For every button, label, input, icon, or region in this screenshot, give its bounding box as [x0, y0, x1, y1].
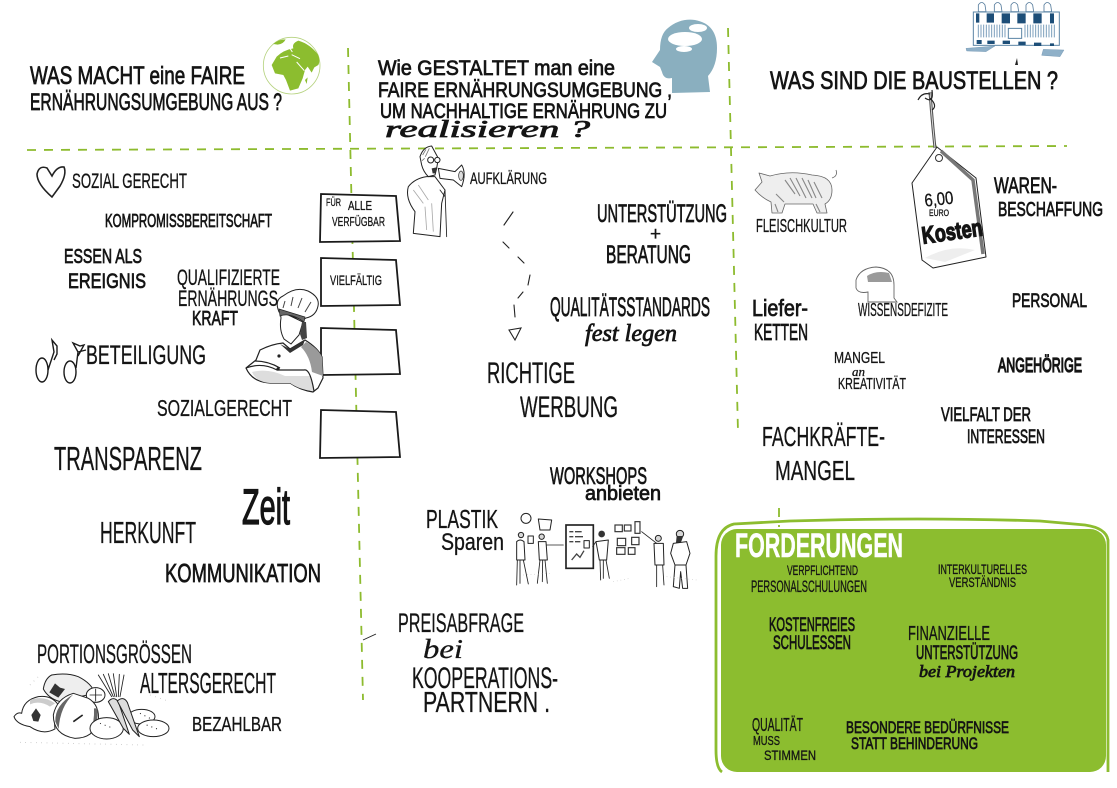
text: Unterstützung und Beratung — [597, 200, 727, 269]
text: qualifizierte Ernährungskraft: ERNÄHRUNGS — [178, 286, 278, 311]
text: Portionsgrößen: PORTIONSGRÖSSEN — [37, 639, 192, 669]
illustration: vegetables — [14, 674, 170, 745]
text: Mangel an Kreativität: MANGEL — [834, 350, 885, 367]
demand: besondere Bedürfnisse: STATT BEHINDERUNG — [851, 734, 978, 753]
heading: first question: ERNÄHRUNGSUMGEBUNG AUS ? — [30, 89, 282, 116]
heading: second question: Wie GESTALTET man eine — [378, 57, 615, 80]
demand: Qualität muss stimmen: STIMMEN — [764, 747, 816, 763]
text: Lieferketten — [752, 295, 808, 345]
heading: second question: realisieren ? — [385, 117, 590, 143]
demand: kostenfreies Schulessen — [769, 615, 855, 654]
panel heading: FORDERUNGEN — [735, 527, 903, 565]
text: Mangel an Kreativität: an — [852, 364, 865, 379]
text: Kompromissbereitschaft: KOMPROMISSBEREITSCHAFT — [105, 211, 272, 231]
text: Mangel an Kreativität — [834, 350, 906, 393]
text: Lieferketten: Liefer- — [752, 295, 808, 321]
text: Workshops anbieten: WORKSHOPS — [550, 463, 647, 490]
text: Vielfalt der Interessen: VIELFALT DER — [941, 405, 1031, 426]
icon: construction barrier — [966, 2, 1064, 57]
text: Qualitätsstandards festlegen — [550, 292, 710, 347]
text: Vielfalt der Interessen — [941, 405, 1045, 448]
text: Unterstützung und Beratung: UNTERSTÜTZUNG — [597, 200, 727, 228]
panel: Forderungen — [716, 519, 1108, 772]
text: Aufklärung: AUFKLÄRUNG — [470, 169, 547, 188]
icon: price tag with rope: EURO — [929, 208, 949, 218]
text: Bezahlbar: BEZAHLBAR — [192, 714, 282, 736]
icon: head with knowledge gap — [856, 267, 897, 302]
text: Fleischkultur: FLEISCHKULTUR — [756, 216, 847, 236]
heading: first question: WAS MACHT eine FAIRE — [30, 62, 245, 90]
text: Workshops anbieten — [550, 463, 661, 505]
text: Plastik sparen: PLASTIK — [426, 504, 498, 534]
text: qualifizierte Ernährungskraft: KRAFT — [192, 308, 238, 330]
heading: second question — [378, 57, 672, 143]
demand: besondere Bedürfnisse: BESONDERE BEDÜRFNISSE — [846, 718, 1009, 737]
text: Transparenz: TRANSPARENZ — [54, 440, 202, 477]
text: Personal: PERSONAL — [1012, 291, 1087, 312]
text: Qualitätsstandards festlegen: QUALITÄTSSTANDARDS — [550, 292, 710, 322]
demand: finanzielle Unterstützung: bei Projekten — [919, 662, 1015, 681]
text: Vielfalt der Interessen: INTERESSEN — [967, 427, 1045, 448]
demand: Qualität muss stimmen: MUSS — [753, 733, 780, 748]
demand: Qualität muss stimmen: QUALITÄT — [752, 715, 803, 735]
text: Essen als Ereignis: EREIGNIS — [68, 270, 146, 293]
box: Für alle verfügbar: VERFÜGBAR — [332, 214, 385, 229]
tag price text: 6,00 — [923, 188, 954, 211]
text: Preisabfrage: PREISABFRAGE — [398, 608, 524, 638]
text: Essen als Ereignis — [64, 246, 146, 293]
demand: finanzielle Unterstützung: FINANZIELLE — [908, 623, 990, 645]
box: Für alle verfügbar — [320, 194, 400, 242]
text: Altersgerecht: ALTERSGERECHT — [140, 668, 276, 700]
text: Warenbeschaffung — [994, 173, 1103, 221]
box: empty two — [320, 410, 400, 458]
text: Beteiligung: BETEILIGUNG — [86, 340, 206, 370]
text: Herkunft: HERKUNFT — [100, 515, 196, 550]
heading: second question: UM NACHHALTIGE ERNÄHRUNG ZU — [380, 100, 667, 123]
text: Lieferketten: KETTEN — [754, 319, 808, 345]
demand: interkulturelles Verständnis: VERSTÄNDNIS — [949, 574, 1016, 590]
box: empty one — [321, 328, 400, 375]
icon: price tag with rope — [912, 58, 1018, 268]
text: Fachkräftemangel — [762, 421, 885, 486]
demand: kostenfreies Schulessen: KOSTENFREIES — [769, 615, 855, 636]
icon: person with megaphone — [407, 146, 464, 237]
text: Zeit: Zeit — [242, 479, 290, 535]
heading: first question — [30, 62, 282, 116]
demand: interkulturelles Verständnis — [938, 561, 1027, 590]
text: sozial gerecht: SOZIAL GERECHT — [72, 170, 187, 193]
text: richtige Werbung: WERBUNG — [520, 391, 618, 424]
text: richtige Werbung — [487, 357, 618, 424]
text: Unterstützung und Beratung: + — [650, 224, 661, 245]
text: Qualitätsstandards festlegen: fest legen — [585, 321, 677, 347]
text: Wissensdefizite: WISSENSDEFIZITE — [858, 300, 948, 320]
text: Plastik sparen — [426, 504, 504, 556]
text: Preisabfrage: bei — [423, 634, 463, 664]
text: Plastik sparen: Sparen — [441, 529, 504, 556]
demand: interkulturelles Verständnis: INTERKULTURELLES — [938, 561, 1027, 577]
icon: head with thought clouds — [652, 20, 717, 93]
text: Unterstützung und Beratung: BERATUNG — [606, 241, 691, 269]
box: Für alle verfügbar: ALLE — [348, 198, 372, 213]
text: Fachkräftemangel: FACHKRÄFTE- — [762, 421, 885, 452]
text: Fachkräftemangel: MANGEL — [775, 455, 855, 486]
demand: besondere Bedürfnisse — [846, 718, 1009, 753]
icon: raised hands — [36, 340, 86, 383]
icon: globe — [263, 37, 320, 94]
demand: Personalschulungen — [751, 562, 867, 596]
demand: Personalschulungen: PERSONALSCHULUNGEN — [751, 577, 867, 596]
box: Vielfältig: VIELFÄLTIG — [330, 272, 382, 288]
box: Vielfältig — [321, 258, 400, 306]
text: Kommunikation: KOMMUNIKATION — [165, 558, 321, 588]
text: richtige Werbung: RICHTIGE — [487, 357, 575, 390]
text: Warenbeschaffung: WAREN- — [994, 173, 1057, 198]
demand: finanzielle Unterstützung — [908, 623, 1018, 681]
text: qualifizierte Ernährungskraft: QUALIFIZIERTE — [177, 265, 280, 290]
text: Essen als Ereignis: ESSEN ALS — [64, 246, 142, 268]
text: Preisabfrage: PARTNERN . — [423, 687, 550, 719]
text: Mangel an Kreativität: KREATIVITÄT — [838, 375, 906, 393]
text: qualifizierte Ernährungskraft — [177, 265, 280, 330]
text: Workshops anbieten: anbieten — [585, 483, 661, 505]
icon: heart — [37, 167, 65, 197]
icon: pig — [755, 170, 836, 213]
text: Sozialgerecht: SOZIALGERECHT — [157, 395, 292, 421]
illustration: chef — [246, 289, 323, 392]
demand: kostenfreies Schulessen: SCHULESSEN — [773, 633, 851, 654]
text: Preisabfrage: KOOPERATIONS- — [412, 662, 558, 695]
illustration: workshop group — [517, 513, 697, 588]
box: Für alle verfügbar: FÜR — [326, 197, 341, 209]
heading: second question: FAIRE ERNÄHRUNGSUMGEBUNG , — [378, 79, 672, 102]
demand: Personalschulungen: VERPFLICHTEND — [787, 562, 858, 578]
demand: finanzielle Unterstützung: UNTERSTÜTZUNG — [916, 643, 1018, 664]
arrow: dashed path downward — [503, 212, 530, 340]
text: Preisabfrage — [363, 608, 558, 719]
icon: price tag with rope: Kosten — [920, 215, 984, 250]
demand: Qualität muss stimmen — [752, 715, 816, 763]
